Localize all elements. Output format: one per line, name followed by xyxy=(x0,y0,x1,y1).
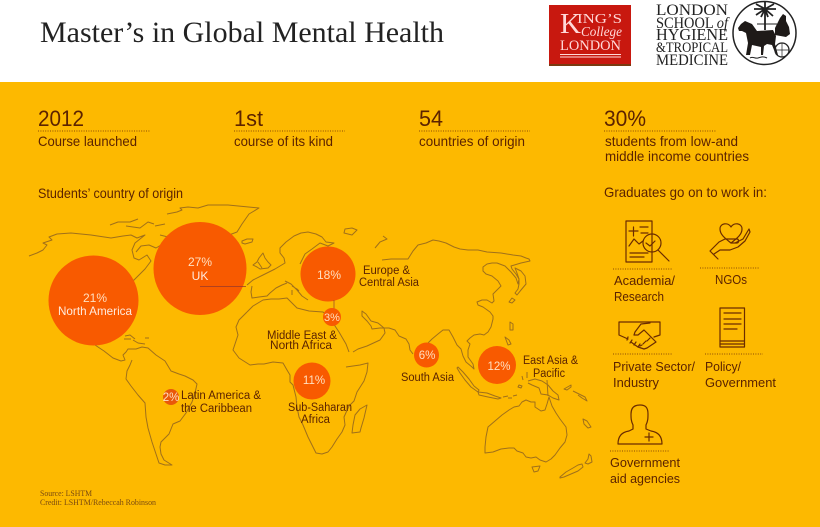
stat: course launched: 2012 xyxy=(38,106,84,131)
bubble: East Asia and Pacific xyxy=(478,346,578,384)
logo: King's College London: ING’S xyxy=(577,12,622,27)
bubble: UK: 27% xyxy=(188,255,212,269)
bubble: East Asia and Pacific: Pacific xyxy=(533,368,565,380)
logo: London School of Hygiene & Tropical Medicine: &TROPICAL xyxy=(656,40,728,56)
source and credit: Credit: LSHTM/Rebeccah Robinson xyxy=(40,498,156,507)
sector: academia and research xyxy=(613,221,675,304)
stat: low and middle income students: middle income countries xyxy=(605,148,749,164)
sector: government aid agencies: aid agencies xyxy=(610,471,680,486)
sector: government aid agencies xyxy=(610,405,680,486)
stat: first of its kind xyxy=(234,106,345,149)
logo: King's College London: LONDON xyxy=(560,38,622,54)
icon: report book xyxy=(720,308,744,347)
bubble: North America: North America xyxy=(58,304,132,318)
bubble: Latin America and the Caribbean: Latin America & xyxy=(181,390,261,402)
sector: private sector and industry: Industry xyxy=(613,375,659,390)
bubble: Middle East and North Africa: North Africa xyxy=(270,340,333,352)
bubble: South Asia: 6% xyxy=(419,350,435,362)
sector: policy and government: Policy/ xyxy=(705,359,741,374)
bubble: Latin America and the Caribbean xyxy=(163,389,261,415)
stat: low and middle income students xyxy=(604,106,749,164)
logo: London School of Hygiene & Tropical Medicine: MEDICINE xyxy=(656,52,728,69)
sector: academia and research: Research xyxy=(614,289,664,304)
stat: countries of origin: 54 xyxy=(419,106,443,131)
bubble: Sub-Saharan Africa: Africa xyxy=(301,414,331,426)
sector: NGOs xyxy=(700,224,759,287)
bubble: East Asia and Pacific: 12% xyxy=(487,361,511,373)
bubble: East Asia and Pacific: East Asia & xyxy=(523,355,578,367)
stat: low and middle income students: 30% xyxy=(604,106,646,131)
bubble: Europe and Central Asia xyxy=(300,246,420,302)
sector: policy and government: Government xyxy=(705,375,776,390)
bubble: UK: UK xyxy=(192,269,208,283)
icon: hand holding heart xyxy=(710,224,750,259)
bubble: South Asia: South Asia xyxy=(401,372,455,384)
stat: first of its kind: course of its kind xyxy=(234,133,333,149)
stat: course launched: Course launched xyxy=(38,133,137,149)
bubble: Middle East and North Africa: 3% xyxy=(324,312,340,324)
bubble: Latin America and the Caribbean: 2% xyxy=(163,392,179,404)
sector: policy and government xyxy=(705,308,776,390)
bubble: UK xyxy=(154,222,246,315)
icon: handshake xyxy=(619,322,660,349)
sector: academia and research: Academia/ xyxy=(614,273,675,288)
bubble: Sub-Saharan Africa xyxy=(288,362,352,426)
stat: course launched xyxy=(38,106,150,149)
source and credit: Source: LSHTM xyxy=(40,489,92,498)
bubble: Sub-Saharan Africa: Sub-Saharan xyxy=(288,402,352,414)
stat: countries of origin: countries of origin xyxy=(419,133,525,149)
logo: London School of Hygiene & Tropical Medicine: HYGIENE xyxy=(656,25,728,44)
logo: London School of Hygiene & Tropical Medicine: LONDON xyxy=(656,2,728,19)
bubble: Middle East and North Africa xyxy=(267,300,341,352)
sector: private sector and industry: Private Sector/ xyxy=(613,359,695,374)
logo: LSHTM crest xyxy=(733,2,796,64)
bubble: North America xyxy=(48,256,138,346)
bubble: Europe and Central Asia: Europe & xyxy=(363,265,410,277)
bubble: Europe and Central Asia: 18% xyxy=(317,268,341,282)
world map xyxy=(29,205,592,478)
logo: King's College London: K xyxy=(560,8,581,40)
bubble: Middle East and North Africa: Middle East & xyxy=(267,330,337,342)
bubble: Sub-Saharan Africa: 11% xyxy=(303,375,325,387)
stat: first of its kind: 1st xyxy=(234,106,263,131)
graduates heading: Graduates go on to work in: xyxy=(604,184,767,200)
icon: person with plus xyxy=(618,405,662,444)
bubble: North America: 21% xyxy=(83,291,107,305)
logo: London School of Hygiene & Tropical Medicine: SCHOOL of xyxy=(656,15,730,32)
sector: government aid agencies: Government xyxy=(610,455,680,470)
bubble: South Asia xyxy=(401,342,455,384)
title: Master’s in Global Mental Health xyxy=(40,17,444,49)
bubble: Latin America and the Caribbean: the Caribbean xyxy=(181,403,252,415)
icon: document with magnifier xyxy=(626,221,669,262)
logo: King's College London: College xyxy=(581,25,622,40)
bubble: Europe and Central Asia: Central Asia xyxy=(359,277,420,289)
map heading: Students’ country of origin xyxy=(38,186,183,201)
logo: King's College London xyxy=(549,5,631,66)
stat: low and middle income students: students from low-and xyxy=(605,133,738,149)
sector: private sector and industry xyxy=(613,322,695,390)
sector: NGOs: NGOs xyxy=(715,272,747,287)
stat: countries of origin xyxy=(419,106,530,149)
source and credit xyxy=(40,489,156,507)
logo: London School of Hygiene & Tropical Medicine xyxy=(656,2,730,69)
